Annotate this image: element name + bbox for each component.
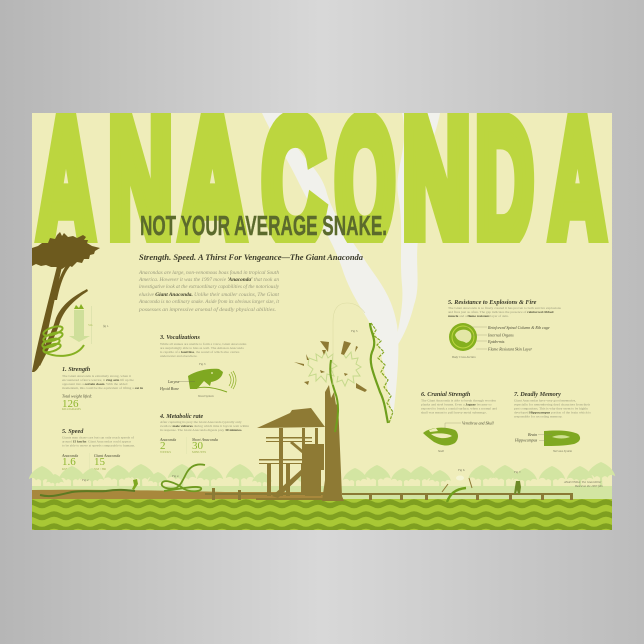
section 6: cranial strength: planks and steel beams. Even a Jaguar became so [421,402,492,406]
section 7: deadly memory: developed Hippocampus portion of the brain which is [514,410,591,414]
section 4: metabolic rate: WEEKS [160,450,171,454]
section 2: speed: 1.6 [62,456,76,468]
section 2: speed: Anaconda [61,453,78,458]
intro paragraph: investigative look at the extraordinary capabilities of the notoriously [139,285,280,290]
section 7: deadly memory [514,391,591,418]
text: Fig 4. [171,474,179,478]
main title: ANACONDA: C [262,82,325,281]
icon: tree silhouette [32,232,100,372]
icon: body cross-section: Body Cross-Section [452,355,476,359]
section 1: strength: Total weight lifted: [62,394,93,398]
icon: rising snake with fig 6 bubble [442,468,472,502]
icon: snake skull: Skull [438,449,444,453]
section 1: strength: 1. Strength [62,366,91,373]
icon: person with weapon [513,470,521,494]
intro paragraph: Anacondas are large, non-venomous boas found in tropical South [138,271,280,276]
icon: snake brain: Hippocampus [514,438,538,442]
subtitle: NOT YOUR AVERAGE SNAKE. [140,210,387,241]
smoke plumes [262,113,440,418]
section 2: speed: 5. Speed [62,428,84,435]
section 1: strength: KILOGRAMS [62,407,81,411]
icon: body cross-section: Internal Organs [487,332,514,338]
section 1: strength: opponent into a certain doom. With the added [62,382,128,386]
section 5: explosions and fire [448,299,561,318]
icon: snake skull: Vertebrae and Skull [462,420,494,426]
section 5: explosions and fire: muscle and a flame resistant layer of skin. [448,314,509,318]
section 6: cranial strength: skull was meant to pull heavy metal submerge. [421,410,487,414]
section 7: deadly memory: 7. Deadly Memory [514,391,561,398]
main title: ANACONDA: A [178,82,246,281]
palm tree band [29,462,615,500]
icon: body cross-section: Reinforced Spinal Column & Rib cage [487,325,550,330]
section 4: metabolic rate: 30 [192,440,204,452]
section 4: metabolic rate: MINUTES [192,450,206,454]
credit [563,480,603,488]
section 4: metabolic rate [159,413,249,454]
main title: ANACONDA: D [476,82,534,281]
icon: weight arrow: fig 1. [103,324,109,328]
icon: watchtower [256,408,326,500]
section 7: deadly memory: Giant Anacondas have very good memories, [514,398,576,404]
section 2: speed: to be able to move at speeds comparable to humans. [62,444,135,448]
icon: explosion burst [294,341,367,392]
icon: running person [132,479,138,490]
section 3: vocalizations: is capable of a loud hiss, the sound of which also carries [160,350,240,355]
main title: ANACONDA [34,113,609,243]
icon: burning snake [370,323,393,423]
icon: snake coiled around branch [41,324,84,356]
section 2: speed: around 15 km/hr. Giant Anacondas could appear [62,440,132,444]
credit: Based on the 1997 film [575,484,603,488]
section 3: vocalizations: While all snakes are unable to form a voice, Giant Anacondas [160,342,247,347]
icon: snake head with sound waves: Larynx [167,379,180,384]
section 1: strength [62,366,143,411]
main title: ANACONDA: N [402,82,470,281]
main title: ANACONDA: N [108,82,172,281]
section 6: cranial strength [421,391,497,414]
section 4: metabolic rate: Anaconda [159,437,176,442]
icon: body cross-section: Epidermis [487,339,505,344]
icon: rising snake with fig 6 bubble: Fig 6. [457,468,465,472]
icon: snake brain: Nervous System [552,449,573,453]
section 4: metabolic rate: After capturing its prey the Giant Anaconda typically only [160,420,242,424]
fence [205,488,573,500]
ground [32,490,340,502]
section 6: cranial strength: exposed to break a cranial surface, when a normal and [421,406,497,412]
section 4: metabolic rate: 4. Metabolic rate [159,413,203,420]
intro paragraph: America. However it was the 1997 movie 'Anaconda' that took an [138,278,280,283]
main title: ANACONDA: O [335,82,395,281]
icon: snake head with sound waves: Vocal System [198,394,215,398]
icon: shattered tree trunk [322,385,344,501]
poster panel [32,113,612,530]
section 7: deadly memory: responsible for recording memory. [514,414,562,418]
section 5: explosions and fire: and fires just as often. The gap indicates the presence of reinforced ribbed [448,310,554,314]
section 2: speed: Giant Anaconda [94,453,120,458]
section 7: deadly memory: past companions. This is why they seem to be highly [514,406,588,410]
heading: tagline: Strength. Speed. A Thirst For Vengeance—The Giant Anaconda [139,253,363,262]
icon: body cross-section [449,323,550,359]
icon: snake through trunk [330,360,338,432]
icon: looping snake [162,464,205,491]
waves [32,499,612,530]
icon: snake brain: Brain [528,432,537,437]
section 1: strength: momentum, this could be the equivalent of lifting a cat in [62,386,143,391]
icon: snake skull [423,420,494,453]
intro paragraph: Anaconda is no ordinary snake. Aside from its obvious larger size, it [138,300,280,305]
section 4: metabolic rate: swallow male vultures during which time it lays in wait within [160,424,249,428]
text: Fig 2. [81,478,89,482]
section 3: vocalizations: 3. Vocalizations [159,334,200,341]
section 4: metabolic rate: 2 [160,440,166,452]
leader line: fig 5 [333,303,365,385]
section 5: explosions and fire: 5. Resistance to Explosions & Fire [448,299,537,306]
section 7: deadly memory: especially for remembering dead characters from their [514,402,591,406]
section 6: cranial strength: The Giant Anaconda is able to break through wooden [421,398,496,402]
icon: weight arrow: 5m [88,323,93,327]
icon: body cross-section: Flame Resistant Skin Layer [487,346,533,352]
section 3: vocalizations: underwater and elsewhere. [160,354,198,358]
icon: snake brain [514,430,580,453]
section 3: vocalizations [159,334,247,366]
credit: ANACONDA: The Giant Killer [563,480,602,484]
section 2: speed: Giants may chase cars but can only reach speeds of [62,436,135,440]
section 1: strength: The Giant Anaconda is extremely strong, when it [62,374,131,379]
section 2: speed: KM / HR [94,467,107,471]
section 2: speed: KM / HR [62,467,75,471]
icon: snake head with sound waves [159,369,236,398]
section 5: explosions and fire: The Giant Anaconda is so finely created it has proven to both survive explosions [448,306,561,310]
intro paragraph: possesses an impressive arsenal of deadly physical abilities. [138,308,276,313]
icon: snake head with sound waves: Hyoid Bone [159,386,179,391]
section 4: metabolic rate: Short Anaconda [192,437,218,442]
section 3: vocalizations: are surprisingly able to hiss as well. The Amazon Anaconda [160,346,244,350]
text: Fig 5. [350,329,358,333]
section 2: speed: 15 [94,456,106,468]
section 1: strength: 126 [62,398,79,410]
section 4: metabolic rate: in response. The Giant Anaconda digests prey 30 minutes. [160,428,242,432]
icon: weight arrow [69,304,109,344]
section 1: strength: encountered a fierce warrior, it ring arm lift up the [62,378,134,383]
icon: person with weapon: Fig 7. [513,470,521,474]
section 6: cranial strength: 6. Cranial Strength [421,391,471,398]
main title: ANACONDA: A [36,82,96,281]
icon: ground snake [40,490,135,496]
section 2: speed [61,428,135,471]
intro paragraph [138,271,280,313]
section 3: vocalizations: Fig 3. [198,362,206,366]
intro paragraph: elusive Giant Anaconda. Unlike their smaller cousins, The Giant [139,293,280,298]
